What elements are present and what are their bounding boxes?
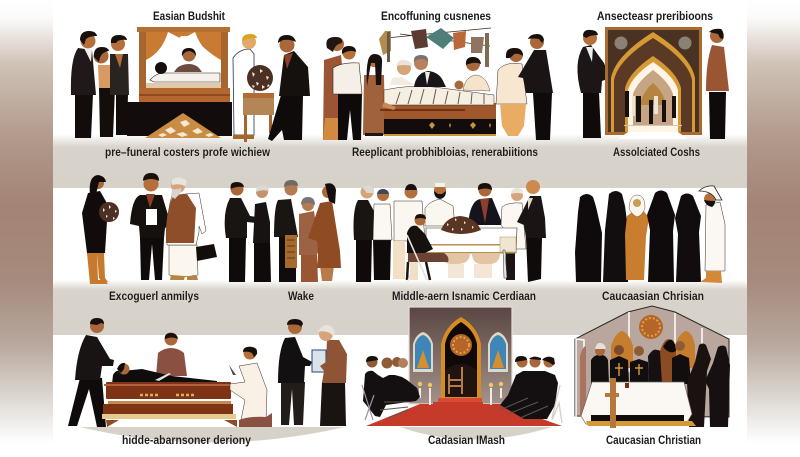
girl with long hair: [363, 54, 385, 136]
scene: exchange of family: [82, 173, 217, 284]
woman in abaya three: [647, 190, 675, 282]
man behind: [110, 35, 129, 135]
small woman: [299, 197, 320, 282]
child and kneeling figure: [454, 57, 490, 91]
offering table with flowers: [243, 65, 274, 142]
ornate arch gate: [605, 27, 702, 139]
heading: Encoffuning cusnenes: Encoffuning cusnenes: [381, 9, 491, 23]
man in white robe left: [393, 184, 425, 280]
grey floor arc left: [80, 427, 345, 442]
woman in abaya two: [603, 191, 629, 282]
mourner man left: [71, 31, 97, 138]
man in white shirt: [333, 46, 362, 140]
tall woman in brown coat: [308, 183, 341, 281]
scene: Cadasian chapel: [362, 307, 562, 426]
scene: ancestral arch: [577, 27, 729, 139]
caption: Caucasian Christian: Caucasian Christian: [606, 433, 701, 447]
caption: Wake: Wake: [288, 289, 314, 303]
central arch with rosette and chair: [441, 317, 481, 400]
man holding book: [354, 185, 379, 282]
man in suit with paper: [130, 173, 171, 280]
man right of arch: [706, 29, 729, 139]
heading: Ansecteasr preribioons: Ansecteasr preribioons: [597, 9, 713, 23]
monk in white: [233, 34, 257, 139]
woman in abaya one: [575, 194, 602, 282]
man in dark suit at coffin: [414, 55, 446, 87]
man in suit far right: [518, 34, 553, 140]
caption: Excoguerl anmilys: Excoguerl anmilys: [109, 289, 199, 303]
altar table and cross: [581, 378, 696, 428]
grey floor band two: [53, 280, 747, 335]
document: [312, 350, 326, 372]
bearded man with cap: [425, 183, 455, 226]
candles: [418, 382, 503, 405]
man in white tshirt: [373, 189, 392, 280]
white coffin with flowers: [426, 216, 517, 278]
heading: Easian Budshit: Easian Budshit: [153, 9, 225, 23]
coffin with draped body: [380, 86, 496, 136]
woman in black near altar two: [705, 346, 730, 427]
boy standing: [156, 332, 187, 376]
man left of arch: [577, 30, 610, 138]
canopy bed: [127, 27, 232, 136]
left stained glass window: [413, 332, 433, 372]
man with fabric: [274, 180, 298, 282]
caption: Caucaasian Chrisian: Caucaasian Chrisian: [602, 289, 704, 303]
elder in brown jacket: [318, 325, 347, 426]
man in suit foreground: [517, 180, 546, 282]
man in suit right: [268, 35, 310, 141]
pile of coins: [145, 113, 221, 138]
woman in black dress with flowers: [82, 175, 119, 284]
woman in brown: [323, 37, 344, 140]
arab man in white: [699, 186, 725, 283]
scene: wake: [225, 180, 341, 282]
grey floor arc middle: [400, 427, 552, 440]
elder in white and brown vest: [166, 178, 217, 280]
seated man on folding chair: [407, 214, 448, 281]
woman in abaya four: [675, 194, 701, 282]
caption: hidde-abarnsoner deriony: hidde-abarnsoner deriony: [122, 433, 251, 447]
man leaning over casket: [68, 318, 114, 427]
prayer flags: [379, 28, 491, 67]
casket with deceased: [102, 363, 237, 427]
caption: Associated Coshs: Assolciated Coshs: [613, 145, 700, 159]
scene: Encoffining: [323, 28, 553, 140]
seated mourners right: [500, 356, 562, 423]
scene: Easian Buddhist viewing: [71, 27, 310, 142]
woman in orange with white hijab: [625, 195, 649, 280]
kneeling man in white: [229, 346, 272, 427]
caption: Middle-aern Isnamic Cerdiaan: Middle-aern Isnamic Cerdiaan: [392, 289, 536, 303]
grey floor band one: [53, 134, 747, 188]
man in suit exchanging document: [278, 319, 312, 425]
caption: Cadasian IMash: Cadasian IMash: [428, 433, 505, 447]
scene: Caucasian Christian women in black: [575, 186, 725, 283]
caption: pre-funeral costers: pre–funeral costers profe wichiew: [105, 145, 271, 159]
red carpet and steps: [366, 398, 562, 426]
scene: Middle Eastern Islamic guardian: [354, 180, 546, 282]
man with handshake: [225, 182, 257, 282]
right stained glass window: [488, 332, 508, 372]
scene: Caucasian Christian altar: [575, 306, 730, 428]
caption: Reeplicant prohibitions: Reeplicant probhibloias, renerabiitions: [352, 145, 538, 159]
man in dark suit behind coffin: [468, 183, 503, 225]
elderly man: [253, 185, 271, 282]
chapel tent: [575, 306, 729, 418]
scene: viewing with casket: [68, 318, 347, 427]
woman in black near altar one: [687, 344, 711, 427]
seated mourners left: [362, 356, 420, 420]
right side band: [747, 0, 800, 457]
clergy and mourners: [591, 339, 691, 384]
left side band: [0, 0, 53, 457]
boy: [94, 47, 115, 137]
elder at coffin: [390, 60, 414, 85]
chapel wall: [409, 307, 512, 404]
mother in cream: [496, 48, 527, 136]
old man in white: [501, 188, 526, 280]
